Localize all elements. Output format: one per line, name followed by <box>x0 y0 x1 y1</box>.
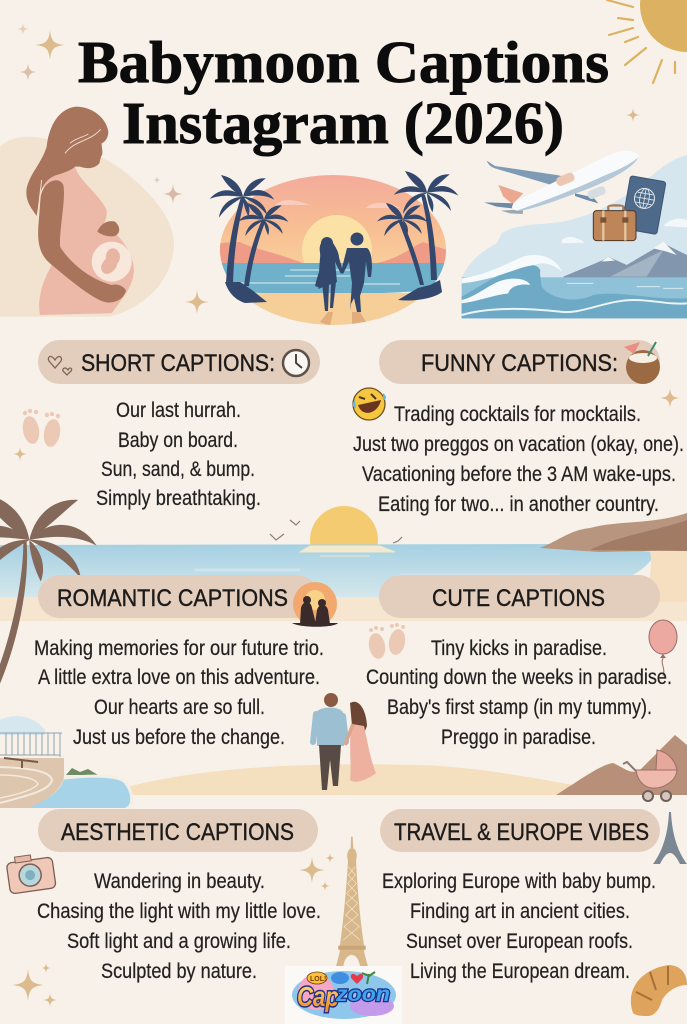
list: funny captions <box>353 403 684 516</box>
heading: romantic captions: ROMANTIC CAPTIONS <box>57 585 288 612</box>
heading: travel and Europe vibes: TRAVEL & EUROPE VIBES <box>394 819 649 846</box>
heading: cute captions <box>379 575 660 618</box>
icon: footprints <box>21 409 62 448</box>
heading: aesthetic captions <box>38 809 318 852</box>
list: aesthetic captions <box>37 870 321 983</box>
list: travel captions: Sunset over European roofs. <box>406 930 633 953</box>
icon: pink camera <box>6 852 56 894</box>
illustration: plane, passport, suitcase and waves <box>462 151 687 318</box>
icon: sunset couple badge <box>292 582 338 627</box>
heading: funny captions <box>379 340 660 384</box>
list: short captions: Our last hurrah. <box>116 399 241 422</box>
illustration: pregnant woman silhouette <box>0 107 174 317</box>
logo: Capzoon: LOL! <box>310 976 326 983</box>
list: aesthetic captions: Wandering in beauty. <box>94 870 265 893</box>
list: short captions: Baby on board. <box>118 429 238 452</box>
illustration: couple at tropical sunset <box>210 170 458 329</box>
icon: coconut drink <box>624 342 660 384</box>
icon: small grey Eiffel Tower <box>653 812 687 864</box>
list: romantic captions: Our hearts are so full. <box>94 696 265 719</box>
illustration: lower beach with couple, pool and mountains <box>0 693 687 808</box>
title: Babymoon Captions <box>78 29 609 95</box>
icon: clock <box>283 350 309 376</box>
heading: travel and Europe vibes <box>380 809 660 852</box>
icon: laughing emoji <box>353 388 386 420</box>
list: travel captions: Finding art in ancient cities. <box>410 900 630 923</box>
heading: cute captions: CUTE CAPTIONS <box>432 585 605 612</box>
list: travel captions: Living the European dream. <box>410 960 630 983</box>
icon: baby feet <box>367 623 407 660</box>
list: romantic captions: Just us before the change. <box>73 726 285 749</box>
icon: baby stroller <box>623 750 677 801</box>
logo: Capzoon <box>285 966 402 1024</box>
icon: sun top right <box>607 0 687 83</box>
list: cute captions: Preggo in paradise. <box>441 726 596 749</box>
list: romantic captions: Making memories for our future trio. <box>34 637 324 660</box>
list: cute captions: Tiny kicks in paradise. <box>431 637 607 660</box>
walking couple <box>313 693 376 790</box>
heading: aesthetic captions: AESTHETIC CAPTIONS <box>61 819 294 846</box>
list: funny captions: Trading cocktails for mocktails. <box>394 403 641 426</box>
list: romantic captions <box>34 637 324 749</box>
heading: short captions <box>38 340 320 384</box>
icon: heart doodles <box>48 356 72 375</box>
list: short captions: Simply breathtaking. <box>96 487 261 510</box>
list: short captions: Sun, sand, & bump. <box>101 458 255 481</box>
title: Instagram (2026) <box>122 90 564 156</box>
list: short captions <box>96 399 261 510</box>
illustration: mid-page beach scene <box>0 493 687 692</box>
icon: pink balloon <box>649 620 677 676</box>
list: travel captions <box>382 870 656 983</box>
title <box>78 29 609 156</box>
list: aesthetic captions: Chasing the light with my little love. <box>37 900 321 923</box>
heading: short captions: SHORT CAPTIONS: <box>81 350 275 377</box>
heading: funny captions: FUNNY CAPTIONS: <box>421 350 618 377</box>
list: aesthetic captions: Soft light and a growing life. <box>67 930 291 953</box>
list: aesthetic captions: Sculpted by nature. <box>101 960 257 983</box>
logo: Capzoon: zoon <box>335 983 390 1006</box>
icon: croissant <box>631 965 687 1016</box>
heading: romantic captions <box>38 575 318 618</box>
list: romantic captions: A little extra love on this adventure. <box>38 666 320 689</box>
illustration: golden Eiffel Tower <box>336 837 368 966</box>
list: cute captions <box>366 637 672 749</box>
logo: Capzoon: Cap <box>297 981 339 1012</box>
